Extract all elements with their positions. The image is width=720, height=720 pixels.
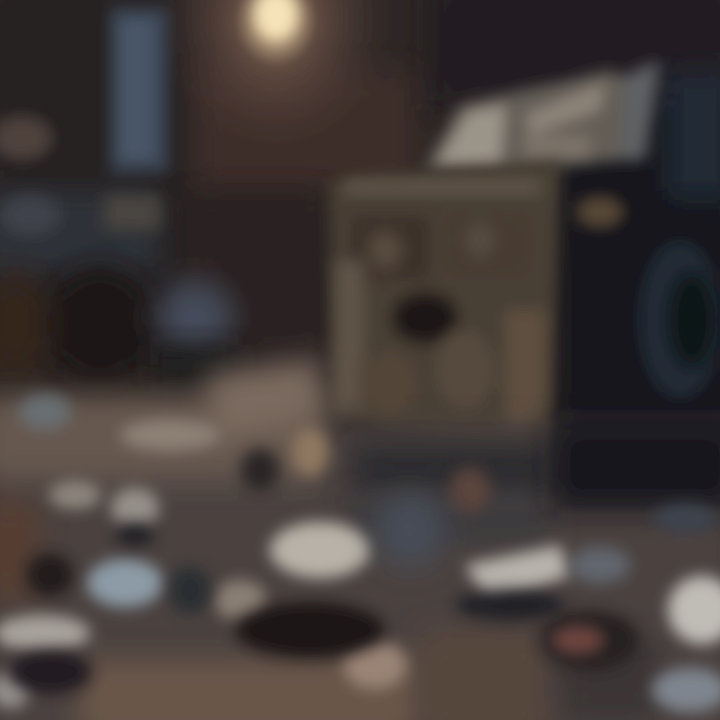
blue window panel [110,8,168,173]
white items atop crate [425,60,660,170]
floor [0,358,720,720]
ceiling light [156,0,396,155]
right dark machine and wheel [555,70,720,490]
left machine [0,116,240,385]
scattered items on floor [0,394,720,712]
wooden crate [330,160,624,450]
